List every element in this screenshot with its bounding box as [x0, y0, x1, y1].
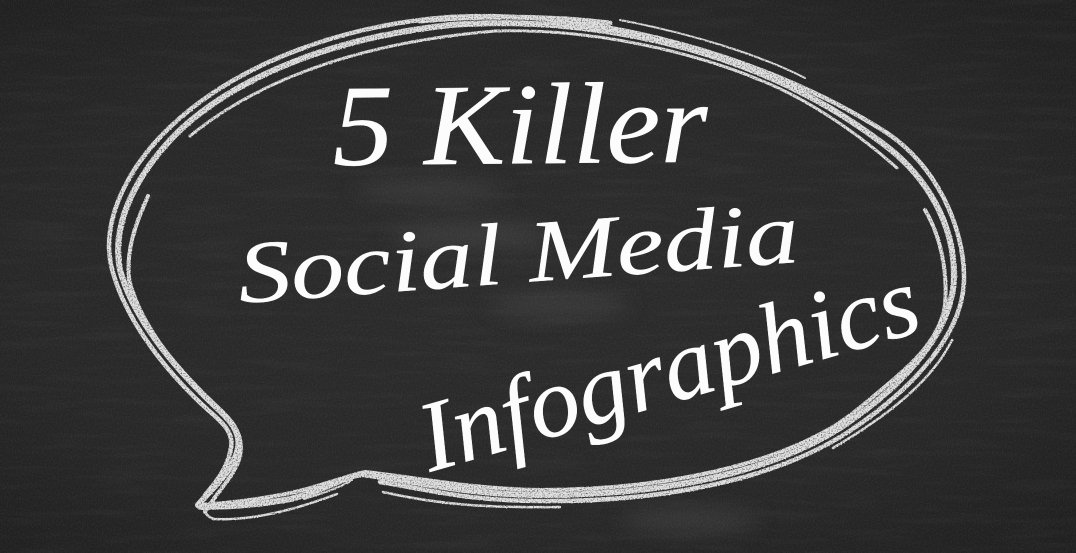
inner left chalk strand: [128, 196, 241, 512]
heading: 5 Killer: 5 Killer: [332, 60, 709, 191]
bottom loose stroke: [383, 492, 560, 507]
tail short stroke: [304, 480, 352, 499]
inner top chalk strand: [190, 31, 897, 168]
tail lower loop: [203, 494, 337, 519]
inner right and bottom chalk strand: [200, 210, 946, 505]
outer chalk strand: [109, 16, 964, 501]
middle chalk strand: [118, 23, 954, 507]
heading: Infographics: Infographics: [404, 244, 931, 493]
lower right loose stroke: [833, 340, 952, 448]
speech bubble chalk outline: [109, 16, 964, 519]
heavy top chalk scrub: [420, 17, 610, 23]
upper right loose stroke: [620, 20, 805, 78]
heading: Social Media: Social Media: [234, 185, 802, 323]
